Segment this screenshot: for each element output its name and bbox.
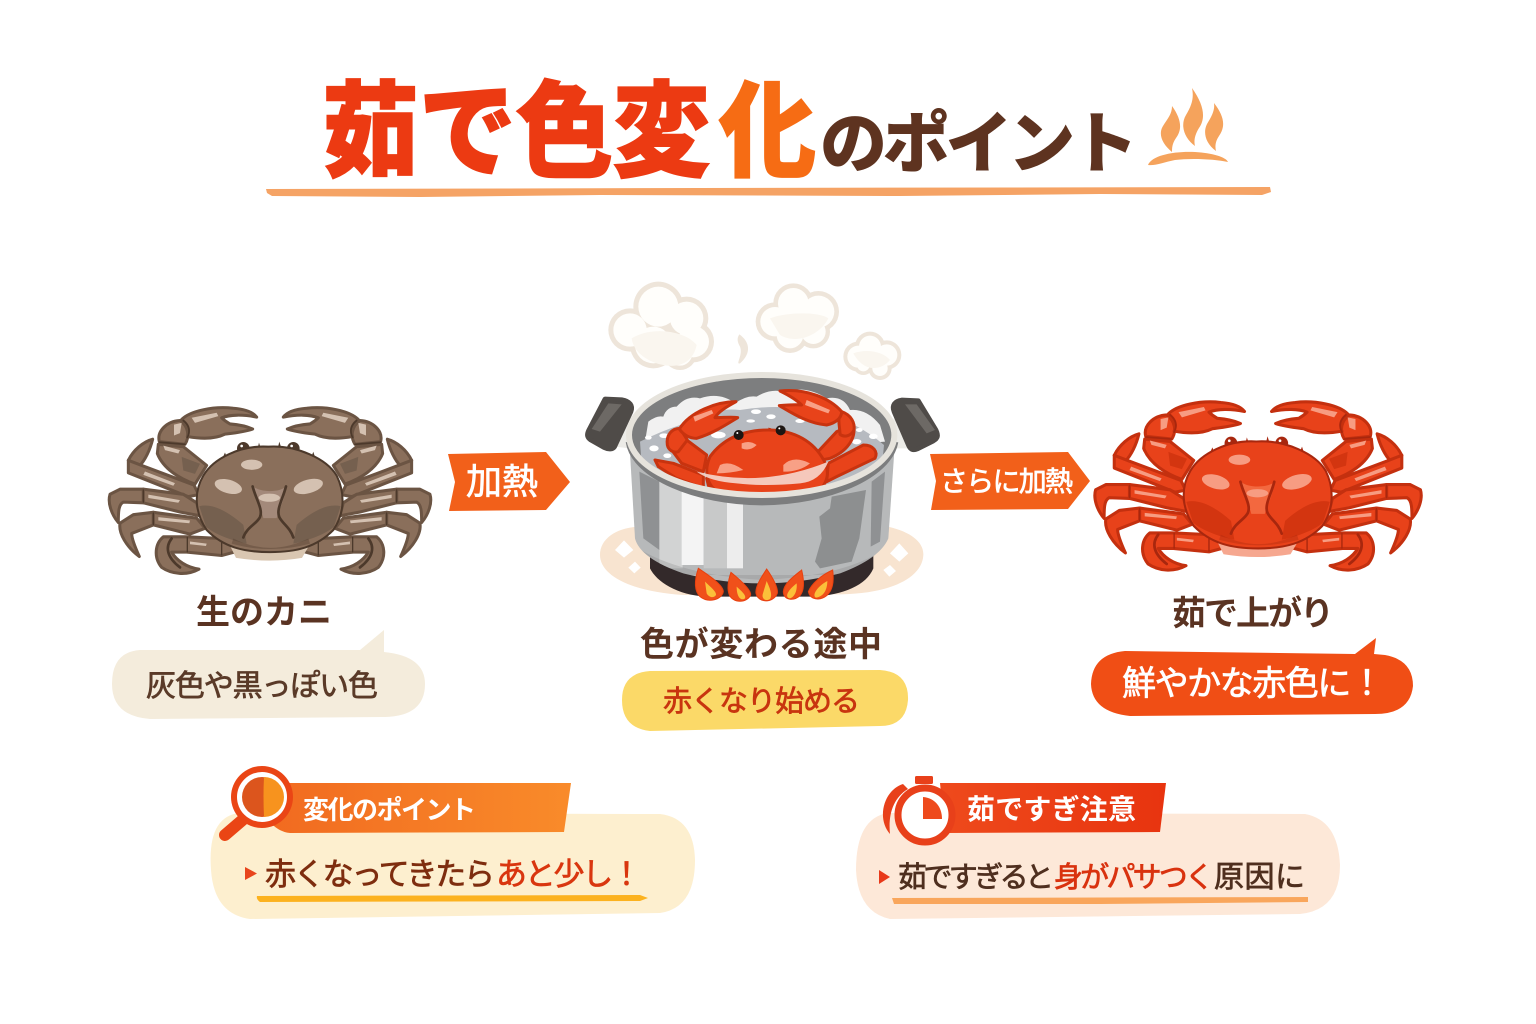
text: warning: 茹ですぎると <box>898 861 1054 894</box>
title: 茹で色変 <box>322 75 710 191</box>
icon: bullet <box>879 870 890 884</box>
label: mid change: 色が変わる途中 <box>640 625 882 664</box>
bubble: raw crab colour: 灰色や黒っぽい色 <box>146 670 378 703</box>
icon: bullet <box>245 867 257 880</box>
crab in pot <box>655 391 876 495</box>
steam clouds <box>608 282 901 380</box>
label: raw crab: 生のカニ <box>196 594 332 632</box>
pot rim <box>629 375 894 501</box>
text: warning <box>898 861 1305 894</box>
bubble: boiled crab colour: 鮮やかな赤色に！ <box>1122 665 1384 703</box>
underline <box>892 897 1308 904</box>
title: 化 <box>719 75 816 191</box>
pot body <box>629 442 895 583</box>
arrow: heat: 加熱 <box>466 461 538 502</box>
arrow: heat <box>448 452 570 511</box>
arrow: more heat <box>930 452 1090 510</box>
ribbon: warning <box>940 783 1166 833</box>
ribbon: warning: 茹ですぎ注意 <box>967 794 1136 825</box>
ribbon: change point <box>268 783 571 833</box>
underline <box>257 895 648 902</box>
bubble: mid change: 赤くなり始める <box>663 685 860 718</box>
text: warning: 原因に <box>1214 861 1305 894</box>
text: change point: 赤くなってきたら <box>265 857 495 892</box>
title underline <box>266 187 1271 197</box>
illustration: pot on stove <box>587 282 938 601</box>
text: warning: 身がパサつく <box>1054 861 1214 894</box>
raw crab illustration <box>109 408 431 573</box>
title <box>322 75 1138 191</box>
icon: timer <box>883 776 952 842</box>
icon: steam <box>1148 88 1228 165</box>
arrow: more heat: さらに加熱 <box>940 466 1073 497</box>
bubble: mid change <box>622 670 908 731</box>
panel: overcooking warning <box>856 776 1340 919</box>
panel: change point <box>211 766 695 919</box>
title: のポイント <box>820 107 1138 182</box>
text: change point: あと少し！ <box>496 857 642 892</box>
burner <box>650 552 873 597</box>
text: change point <box>265 857 642 892</box>
label: boiled crab: 茹で上がり <box>1172 594 1334 633</box>
flames <box>695 568 833 601</box>
bubble: raw crab colour <box>112 630 425 719</box>
stove mat <box>600 527 923 595</box>
pot inside with boiling water <box>632 378 892 458</box>
boiled crab illustration <box>1095 402 1421 570</box>
icon: magnifier <box>225 766 293 835</box>
ribbon: change point: 変化のポイント <box>303 795 476 825</box>
bubble: boiled crab colour <box>1091 638 1413 716</box>
pot handles <box>587 399 938 450</box>
